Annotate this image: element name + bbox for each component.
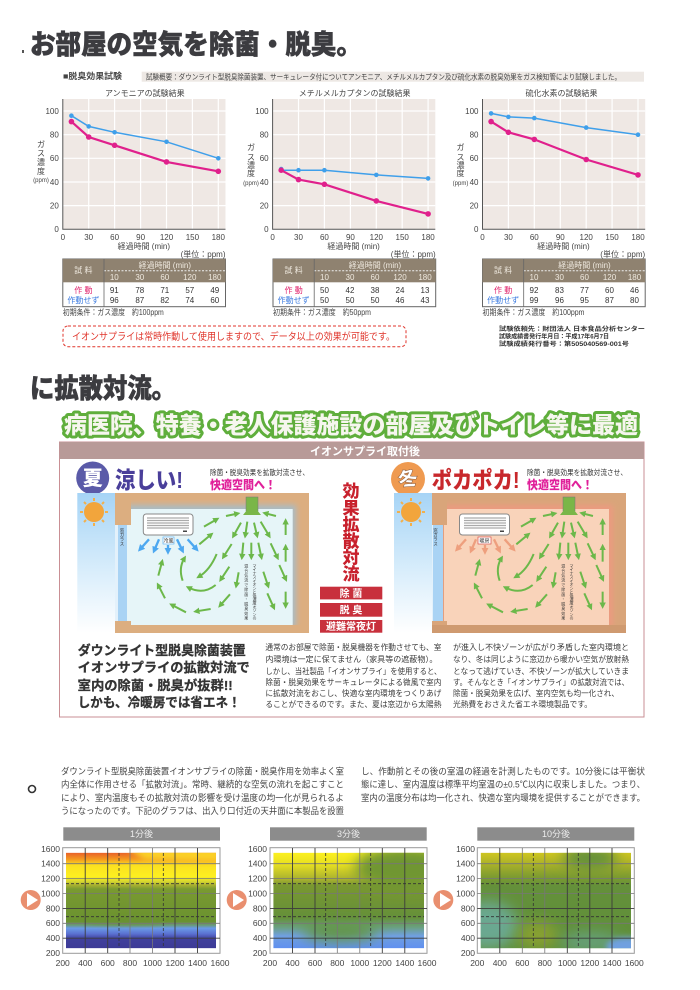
chart: hydrogen sulfide: ガ — [456, 142, 464, 152]
heatmap: after 1 minute: 800 — [46, 904, 60, 914]
center heading: diffusion effect: 流 — [342, 564, 360, 584]
heatmap: after 10 minutes: 800 — [538, 958, 552, 968]
temperature text right — [361, 766, 645, 803]
heatmap: after 10 minutes: 400 — [493, 958, 507, 968]
table: hydrogen sulfide: 10 — [530, 273, 539, 282]
table: hydrogen sulfide: 80 — [630, 296, 639, 305]
chart: hydrogen sulfide: 30 — [504, 233, 513, 242]
cold air arrows — [140, 539, 196, 551]
vertical note: 混合気流で除菌・脱臭効果 — [244, 563, 249, 621]
temperature text left: うになったのです。下記のグラフは、出入り口付近の天井面に本製品を設置 — [61, 805, 344, 816]
table: methyl mercaptan: 50 — [371, 296, 380, 305]
temperature text left: 内全体に作用させる「拡散対流」。常時、継続的な空気の流れを起こすこと — [61, 778, 344, 790]
chart: hydrogen sulfide: 90 — [556, 233, 565, 242]
chart: ammonia: 度 — [37, 166, 45, 176]
chart: hydrogen sulfide: 40 — [470, 178, 479, 187]
heatmap: after 10 minutes: 1400 — [456, 858, 475, 868]
chart: methyl mercaptan: 0 — [264, 225, 269, 234]
body text column 2: が進入し不快ゾーンが広がり矛盾した室内環境と — [453, 642, 629, 652]
chart: ammonia: (ppm) — [33, 178, 49, 184]
panel header: イオンサプライ取付後 — [310, 444, 420, 458]
table: ammonia: 60 — [160, 273, 170, 282]
heatmap: after 1 minute: 1600 — [211, 958, 230, 968]
chart: methyl mercaptan: ガ — [247, 142, 255, 152]
center heading: diffusion effect: 拡 — [342, 514, 360, 534]
heatmap: after 3 minutes: 1600 — [418, 958, 437, 968]
chart: hydrogen sulfide: 60 — [470, 154, 479, 163]
cold air label: 冷風 — [163, 538, 174, 544]
table: methyl mercaptan: 作動せず — [278, 295, 310, 305]
chart: methyl mercaptan: メチルメルカプタンの試験結果 — [299, 88, 410, 98]
body text column 1: に拡散対流をおこし、快適な室内環境をつくりあげ — [265, 688, 441, 698]
chart: methyl mercaptan: 経過時間 (min) — [327, 241, 380, 251]
table: ammonia: 30 — [135, 273, 145, 282]
table: hydrogen sulfide: 60 — [580, 273, 589, 282]
test heading: ■脱臭効果試験 — [63, 71, 123, 81]
table: ammonia: 57 — [185, 286, 195, 295]
heatmap: after 1 minute: 1分後 — [130, 828, 153, 839]
temperature text right: 態に達し、室内温度は標準平均室温の±0.5℃以内に収束しました。つまり、 — [361, 778, 645, 790]
winter heading — [391, 462, 627, 496]
table: ammonia: 180 — [208, 273, 222, 282]
table: ammonia: 作 動 — [74, 285, 93, 295]
test lab information: 試験成績書発行年月日：平成17年6月7日 — [499, 332, 609, 340]
heatmap: after 1 minute: 800 — [123, 958, 137, 968]
green banner: 病医院、特養・老人保護施設の部屋及びトイレ等に最適 — [64, 412, 638, 438]
chart: hydrogen sulfide: 硫化水素の試験結果 — [526, 88, 598, 98]
heatmap: after 1 minute: 400 — [78, 958, 93, 968]
body text column 2: 光熱費をおさえた省エネ環境製品です。 — [453, 699, 592, 709]
temperature text left: ダウンライト型脱臭除菌装置イオンサプライの除菌・脱臭作用を効率よく室 — [61, 766, 344, 776]
chart: ammonia: 90 — [136, 233, 146, 242]
heatmap: after 10 minutes: 600 — [461, 918, 475, 928]
heatmap: after 10 minutes: 1200 — [580, 958, 600, 968]
chart: hydrogen sulfide: 150 — [605, 233, 619, 242]
bold summary: イオンサプライの拡散対流で — [78, 660, 250, 675]
callout: continuous operation — [63, 326, 406, 347]
bold summary — [78, 643, 250, 710]
body text column 2 — [453, 642, 629, 709]
feature badges: 除 菌 — [340, 587, 362, 600]
table: ammonia: 78 — [135, 286, 145, 295]
heatmap: after 1 minute: 1400 — [41, 858, 60, 868]
summer heading: 夏 — [83, 468, 103, 490]
table: hydrogen sulfide: 87 — [605, 296, 614, 305]
table: methyl mercaptan: (単位：ppm) — [391, 249, 436, 259]
heatmap: after 1 minute: 1200 — [41, 874, 60, 884]
table: ammonia: 60 — [210, 296, 220, 305]
table: methyl mercaptan: 50 — [320, 296, 329, 305]
body text column 1: 内環境は一定に保てません（家具等の遮蔽物）。 — [265, 654, 437, 664]
table: ammonia: 経過時間 (min) — [139, 260, 191, 270]
chart: ammonia: 濃 — [37, 157, 45, 167]
body text column 1: 通常のお部屋で除菌・脱臭機器を作動させても、室 — [265, 642, 441, 652]
chart: methyl mercaptan: 150 — [396, 233, 409, 242]
bold summary: しかも、冷暖房では省エネ！ — [78, 695, 241, 710]
heatmap: after 3 minutes: 800 — [330, 958, 345, 968]
chart: methyl mercaptan: 0 — [270, 233, 275, 242]
chart: ammonia: 80 — [50, 130, 59, 140]
warm air label: 暖房 — [479, 538, 490, 544]
bold summary: ダウンライト型脱臭除菌装置 — [78, 643, 246, 658]
table: methyl mercaptan: 作 動 — [284, 285, 303, 295]
table: ammonia: 初期条件：ガス濃度 約100ppm — [63, 307, 164, 317]
chart: hydrogen sulfide: 100 — [465, 107, 479, 116]
heatmap: after 3 minutes: 1400 — [395, 958, 415, 968]
table: ammonia: 作動せず — [67, 295, 99, 305]
table: methyl mercaptan: 38 — [371, 286, 380, 295]
chart: ammonia: 180 — [212, 233, 226, 242]
table: methyl mercaptan: 120 — [393, 273, 407, 282]
heatmap: after 3 minutes: 1000 — [248, 888, 267, 898]
chart: hydrogen sulfide: 濃 — [456, 160, 464, 170]
page title: お部屋の空気を除菌・脱臭。 — [30, 30, 362, 60]
table: ammonia: 96 — [110, 296, 119, 305]
summer heading: 快適空間へ！ — [210, 477, 276, 492]
panel header — [60, 442, 644, 459]
section title: diffusion convection: に拡散対流。 — [30, 374, 176, 404]
chart: methyl mercaptan: 120 — [370, 233, 384, 242]
icon: sun — [397, 498, 425, 526]
heatmap: after 10 minutes — [456, 827, 650, 968]
icon: play arrow 2 — [227, 890, 247, 910]
temperature text right: 室内の温度分布は均一化され、快適な室内環境を提供することができます。 — [361, 792, 645, 803]
icon: sun — [80, 498, 108, 526]
feature badges — [320, 587, 382, 633]
airflow arrows — [475, 513, 603, 612]
chart: hydrogen sulfide: 経過時間 (min) — [537, 241, 590, 251]
heatmap: after 1 minute: 1000 — [143, 958, 162, 968]
chart: ammonia: ス — [37, 149, 45, 158]
test lab information — [499, 325, 645, 348]
chart: ammonia: 120 — [160, 233, 174, 242]
heatmap: after 3 minutes: 400 — [253, 933, 267, 943]
table: methyl mercaptan: 50 — [346, 296, 355, 305]
body text column 1: ることができるのです。また、夏は窓辺から太陽熱 — [265, 699, 441, 709]
heatmap: after 3 minutes: 600 — [253, 918, 267, 928]
chart: methyl mercaptan: 30 — [294, 233, 303, 242]
chart: hydrogen sulfide: 0 — [480, 233, 485, 242]
table: hydrogen sulfide: 120 — [603, 273, 617, 282]
heatmap: after 1 minute — [41, 827, 230, 968]
chart: hydrogen sulfide: 60 — [530, 233, 539, 242]
table: hydrogen sulfide: 180 — [628, 273, 642, 282]
table: hydrogen sulfide: 96 — [555, 296, 564, 305]
vertical note: マイナスイオンと低濃度オゾンの — [252, 564, 258, 620]
summer heading — [76, 462, 309, 494]
table: methyl mercaptan — [273, 249, 436, 317]
heatmap: after 3 minutes: 400 — [285, 958, 300, 968]
section marker — [28, 786, 36, 792]
table: hydrogen sulfide: 作動せず — [487, 295, 519, 305]
heatmap: after 10 minutes: 1000 — [456, 888, 475, 898]
heatmap: after 1 minute: 200 — [56, 958, 70, 968]
chart: hydrogen sulfide: 度 — [456, 168, 464, 178]
table: hydrogen sulfide: 83 — [555, 286, 564, 295]
center heading: diffusion effect: 対 — [342, 548, 360, 568]
chart: ammonia: 150 — [186, 233, 200, 242]
chart: hydrogen sulfide: 20 — [470, 202, 479, 210]
table: hydrogen sulfide: 30 — [555, 273, 564, 282]
heatmap: after 3 minutes: 200 — [253, 948, 267, 958]
summer heading: 除菌・脱臭効果を拡散対流させ、 — [210, 467, 309, 477]
callout: continuous operation: イオンサプライは常時作動して使用しますので、データ以上の効果が可能です。 — [72, 330, 395, 343]
heatmap: after 3 minutes: 1000 — [350, 958, 370, 968]
heatmap: after 3 minutes — [248, 827, 436, 966]
heatmap: after 1 minute: 1200 — [166, 958, 185, 968]
icon: play arrow 3 — [433, 890, 453, 910]
icon: play arrow 1 — [21, 890, 41, 910]
winter heading: 冬 — [395, 465, 421, 493]
body text column 2: 除菌・脱臭効果を広げ、室内空気も均一化され、 — [453, 688, 619, 698]
heatmap: after 3 minutes: 800 — [253, 904, 267, 914]
chart: methyl mercaptan: 80 — [260, 130, 269, 140]
feature badges: 脱 臭 — [340, 604, 362, 616]
summer room diagram — [77, 493, 309, 633]
table: methyl mercaptan: 試 料 — [284, 265, 303, 275]
table: ammonia: 10 — [110, 273, 119, 282]
icon: air conditioner — [460, 514, 510, 535]
table: hydrogen sulfide: 99 — [530, 296, 539, 305]
warm air label — [478, 537, 491, 544]
heatmap: after 10 minutes: 200 — [461, 948, 475, 958]
table: hydrogen sulfide: 77 — [580, 286, 589, 295]
heatmap: after 1 minute: 1400 — [188, 958, 207, 968]
table: hydrogen sulfide: 作 動 — [494, 285, 512, 295]
center heading: diffusion effect — [342, 482, 360, 584]
chart: methyl mercaptan — [243, 88, 435, 251]
icon: ceiling unit — [243, 497, 261, 515]
chart: methyl mercaptan: ス — [247, 153, 255, 162]
table: methyl mercaptan: 初期条件：ガス濃度 約50ppm — [273, 307, 371, 317]
chart: ammonia: アンモニアの試験結果 — [105, 88, 185, 98]
heatmap: after 10 minutes: 10分後 — [542, 828, 570, 839]
table: hydrogen sulfide: 46 — [630, 286, 639, 295]
chart: hydrogen sulfide: 0 — [474, 225, 479, 234]
table: hydrogen sulfide: 95 — [580, 296, 589, 305]
table: ammonia — [63, 249, 226, 317]
chart: hydrogen sulfide: ス — [456, 153, 464, 162]
table: hydrogen sulfide: 初期条件：ガス濃度 約100ppm — [482, 307, 585, 317]
warm air arrows — [457, 539, 513, 551]
table: methyl mercaptan: 経過時間 (min) — [349, 260, 402, 270]
table: methyl mercaptan: 42 — [346, 286, 355, 295]
chart: ammonia: 0 — [54, 225, 59, 234]
winter room diagram: 窓ガラス — [433, 527, 438, 546]
heatmap: after 3 minutes: 1200 — [373, 958, 392, 968]
table: hydrogen sulfide: 92 — [530, 286, 539, 295]
heatmap: after 10 minutes: 400 — [461, 933, 475, 943]
icon: air conditioner — [143, 514, 193, 535]
chart: ammonia: 20 — [50, 202, 59, 210]
test overview strip: 試験概要：ダウンライト型脱臭除菌装置、サーキュレータ付についてアンモニア、メチルメルカプタン及び硫化水素の脱臭効果をガス検知管により試験しました。 — [146, 72, 621, 82]
table: methyl mercaptan: 10 — [320, 273, 329, 282]
table: hydrogen sulfide: 60 — [605, 286, 614, 295]
table: ammonia: 74 — [185, 296, 195, 305]
heatmap: after 3 minutes: 1600 — [248, 844, 267, 854]
chart: ammonia: 100 — [45, 107, 59, 116]
chart: ammonia: 30 — [84, 233, 94, 242]
table: ammonia: 87 — [135, 296, 145, 305]
table: ammonia: 120 — [183, 273, 197, 282]
winter heading: ポカポカ! — [432, 467, 520, 493]
heatmap: after 1 minute: 600 — [46, 918, 60, 928]
body text column 1: しかし、当社製品「イオンサプライ」を使用すると、 — [265, 666, 441, 676]
table: methyl mercaptan: 46 — [396, 296, 405, 305]
heatmap: after 3 minutes: 1400 — [248, 858, 267, 868]
temperature text left: により、室内温度もその拡散対流の影響を受け温度の均一化が見られるよ — [61, 792, 344, 803]
chart: methyl mercaptan: 60 — [320, 233, 329, 242]
table: ammonia: 49 — [210, 286, 220, 295]
feature badges: 避難常夜灯 — [326, 620, 376, 633]
heatmap: after 1 minute: 600 — [101, 958, 115, 968]
chart: methyl mercaptan: 100 — [255, 107, 269, 116]
panel: after installation — [60, 442, 644, 717]
heatmap: after 10 minutes: 1200 — [456, 874, 475, 884]
winter heading: 快適空間へ！ — [527, 477, 593, 492]
bold summary: 室内の除菌・脱臭が抜群!! — [78, 678, 233, 693]
table: methyl mercaptan: 60 — [371, 273, 380, 282]
table: ammonia: 82 — [160, 296, 170, 305]
table: ammonia: (単位：ppm) — [181, 249, 226, 259]
chart: methyl mercaptan: (ppm) — [243, 181, 259, 187]
chart: methyl mercaptan: 濃 — [247, 160, 255, 170]
chart: ammonia: 40 — [50, 178, 59, 187]
airflow arrows — [158, 513, 286, 612]
chart: hydrogen sulfide: (ppm) — [453, 181, 468, 187]
chart: methyl mercaptan: 180 — [421, 233, 435, 242]
chart: ammonia: ガ — [37, 139, 45, 149]
table: methyl mercaptan: 30 — [346, 273, 355, 282]
temperature text right: し、作動前とその後の室温の経過を計測したものです。10分後には平衡状 — [361, 766, 645, 776]
heatmap: after 3 minutes: 600 — [308, 958, 322, 968]
icon: ceiling unit — [560, 497, 578, 515]
table: hydrogen sulfide: (単位：ppm) — [600, 249, 646, 259]
body text column 1 — [265, 642, 441, 709]
heatmap: after 3 minutes: 200 — [263, 958, 277, 968]
test lab information: 試験依頼先：財団法人 日本食品分析センター — [499, 325, 645, 333]
table: methyl mercaptan: 50 — [320, 286, 329, 295]
summer room diagram: 窓ガラス — [119, 527, 125, 546]
chart: methyl mercaptan: 60 — [260, 154, 269, 163]
vertical note: マイナスイオンと低濃度オゾンの — [570, 564, 574, 620]
body text column 2: なり、冬は同じように窓辺から暖かい空気が放射熱 — [453, 654, 629, 664]
heatmap: after 10 minutes: 600 — [515, 958, 530, 968]
vertical note — [244, 563, 258, 621]
heatmap: after 3 minutes: 1200 — [248, 874, 267, 884]
chart: ammonia — [33, 88, 226, 251]
table: methyl mercaptan: 13 — [421, 286, 430, 295]
table: methyl mercaptan: 43 — [421, 296, 430, 305]
table: hydrogen sulfide: 経過時間 (min) — [558, 260, 611, 270]
chart: ammonia: 経過時間 (min) — [118, 241, 170, 251]
table: ammonia: 71 — [160, 286, 170, 295]
table: ammonia: 試 料 — [74, 265, 93, 275]
chart: ammonia: 60 — [110, 233, 120, 242]
heatmap: after 3 minutes: 3分後 — [337, 828, 360, 839]
winter room diagram — [394, 493, 626, 633]
heatmap: after 1 minute: 400 — [46, 933, 60, 943]
heatmap: after 10 minutes: 1600 — [456, 844, 475, 854]
table: methyl mercaptan: 24 — [396, 286, 405, 295]
heatmap: after 10 minutes: 1400 — [603, 958, 622, 968]
heatmap: after 10 minutes: 800 — [461, 904, 475, 914]
body text column 2: す。そんなとき「イオンサプライ」の拡散対流では、 — [453, 677, 629, 687]
heatmap: after 1 minute: 1000 — [41, 888, 60, 898]
table: hydrogen sulfide: 試 料 — [494, 265, 512, 275]
chart: methyl mercaptan: 度 — [247, 168, 255, 178]
center heading: diffusion effect: 散 — [342, 531, 360, 551]
chart: ammonia: 60 — [50, 154, 59, 163]
vertical note: 混合気流で除菌・脱臭効果 — [561, 563, 566, 621]
table: hydrogen sulfide — [482, 249, 646, 317]
center heading: diffusion effect: 果 — [342, 499, 360, 518]
chart: ammonia: 0 — [61, 233, 66, 242]
heatmap: after 10 minutes: 1600 — [625, 958, 644, 968]
chart: methyl mercaptan: 40 — [260, 178, 269, 187]
chart: hydrogen sulfide: 80 — [470, 130, 479, 140]
temperature text left — [61, 766, 344, 816]
table: ammonia: 91 — [110, 286, 119, 295]
heatmap: after 10 minutes: 200 — [470, 958, 485, 968]
chart: hydrogen sulfide: 180 — [631, 233, 645, 242]
chart: methyl mercaptan: 20 — [260, 202, 269, 210]
test lab information: 試験成績発行番号：第505040569-001号 — [499, 340, 629, 348]
chart: hydrogen sulfide — [453, 88, 645, 251]
heatmap: after 10 minutes: 1000 — [558, 958, 577, 968]
table: methyl mercaptan: 180 — [418, 273, 432, 282]
chart: hydrogen sulfide: 120 — [580, 233, 593, 242]
vertical note — [561, 563, 574, 621]
center heading: diffusion effect: 効 — [342, 482, 360, 501]
heatmap: after 1 minute: 1600 — [41, 844, 60, 854]
chart: methyl mercaptan: 90 — [346, 233, 355, 242]
summer heading: 涼しい! — [115, 467, 183, 493]
winter heading: 除菌・脱臭効果を拡散対流させ、 — [527, 467, 627, 477]
body text column 2: となって逃げていき、不快ゾーンが拡大していきま — [453, 666, 629, 676]
heatmap: after 1 minute: 200 — [46, 948, 60, 958]
body text column 1: 除菌・脱臭効果をサーキュレータによる微風で室内 — [265, 677, 441, 687]
